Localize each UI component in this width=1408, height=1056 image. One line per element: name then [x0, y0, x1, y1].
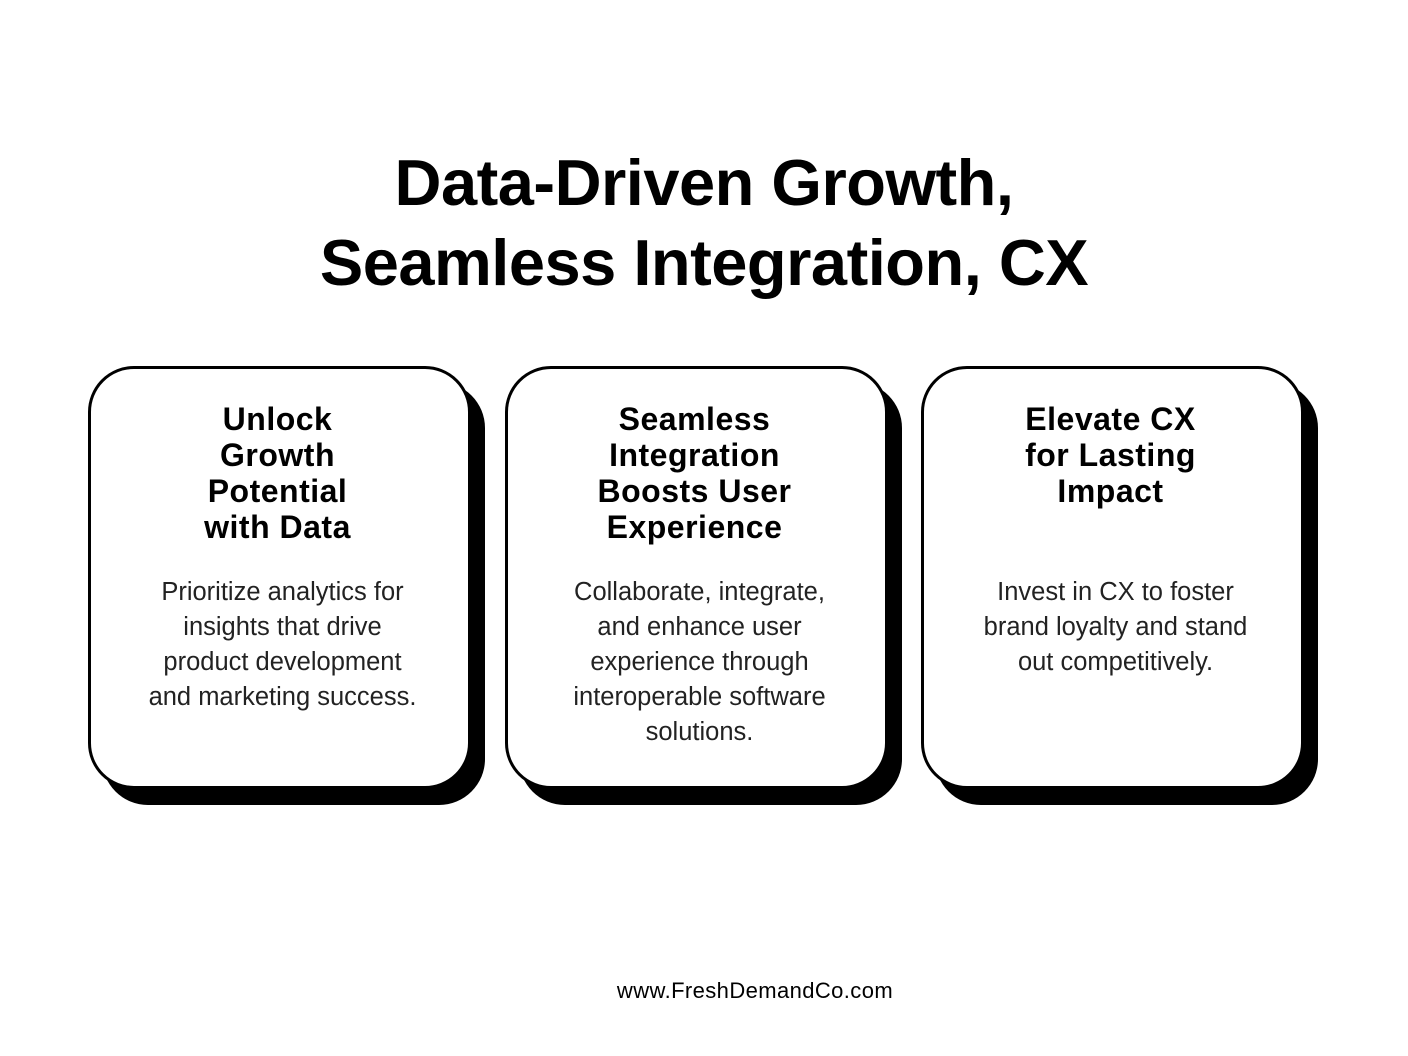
title: Seamless Integration, CX	[320, 226, 1088, 299]
text: cx: brand loyalty and stand	[984, 613, 1247, 641]
panel: cx	[921, 366, 1318, 805]
title	[320, 146, 1088, 299]
text: cx: out competitively.	[1018, 648, 1213, 676]
panel: integration	[505, 366, 902, 805]
heading: cx: for Lasting	[1025, 437, 1196, 473]
title: Data-Driven Growth,	[395, 146, 1013, 219]
heading: growth: Unlock	[223, 401, 332, 437]
footer: www.FreshDemandCo.com	[617, 978, 893, 1003]
heading: integration	[598, 401, 792, 545]
text: integration: experience through	[590, 648, 809, 676]
heading: integration: Seamless	[619, 401, 770, 437]
text: growth: Prioritize analytics for	[161, 578, 404, 606]
text: integration: solutions.	[646, 718, 753, 746]
text: growth: product development	[163, 648, 402, 676]
text: integration: Collaborate, integrate,	[574, 578, 825, 606]
heading: growth: Growth	[220, 437, 335, 473]
heading: integration: Experience	[607, 509, 782, 545]
text: integration: and enhance user	[597, 613, 802, 641]
text: growth: and marketing success.	[149, 683, 416, 711]
text: cx	[984, 578, 1247, 676]
text: growth	[149, 578, 416, 711]
heading: integration: Integration	[609, 437, 780, 473]
heading: growth: with Data	[204, 509, 351, 545]
heading: cx	[1025, 401, 1196, 509]
heading: growth	[204, 401, 351, 545]
heading: growth: Potential	[208, 473, 347, 509]
heading: cx: Elevate CX	[1025, 401, 1196, 437]
text: integration: interoperable software	[573, 683, 826, 711]
panel: growth	[88, 366, 485, 805]
text: growth: insights that drive	[183, 613, 382, 641]
heading: cx: Impact	[1057, 473, 1164, 509]
text: integration	[573, 578, 826, 746]
text: cx: Invest in CX to foster	[997, 578, 1234, 606]
heading: integration: Boosts User	[598, 473, 792, 509]
